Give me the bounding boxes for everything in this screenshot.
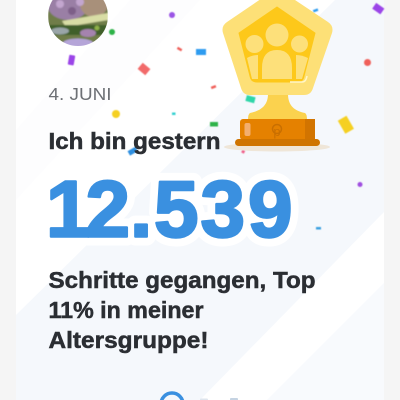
trophy base logo: p	[273, 124, 281, 139]
step count: 12.539	[46, 164, 292, 254]
avatar photo	[48, 0, 108, 48]
trophy pentagon shield	[222, 0, 332, 95]
trophy people icon	[246, 24, 308, 79]
description	[48, 267, 316, 353]
trophy base	[240, 119, 315, 140]
description: Altersgruppe!	[48, 327, 208, 353]
trophy shadow	[224, 142, 330, 152]
step count: 12.539	[46, 164, 292, 254]
trophy highlight	[290, 76, 307, 82]
trophy stem	[248, 94, 307, 120]
logo at bottom	[161, 393, 238, 400]
description: 11% in meiner	[48, 297, 204, 323]
date: 4. JUNI	[48, 84, 112, 104]
description: Schritte gegangen, Top	[48, 267, 316, 293]
trophy	[222, 0, 332, 152]
heading: Ich bin gestern	[48, 128, 220, 154]
confetti	[68, 3, 384, 229]
